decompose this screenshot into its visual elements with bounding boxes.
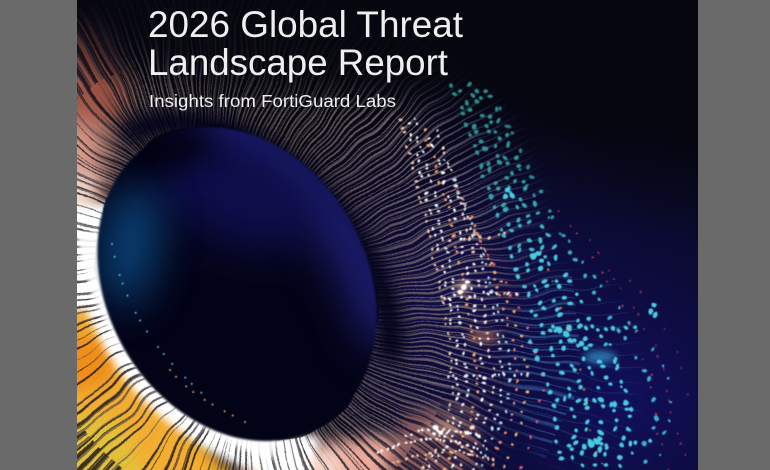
warm and white particles [378,120,542,470]
pupil [96,126,378,443]
particle field [378,85,690,470]
subtitle: Insights from FortiGuard Labs [149,91,396,111]
rim sparks along pupil edge [112,244,250,425]
bright coarse iris strands [77,11,486,470]
white rim of the pupil [88,232,275,450]
faint red particles [540,210,690,470]
teal particles [452,85,671,470]
title: 2026 Global Threat [148,4,464,45]
title: Landscape Report [148,42,449,83]
dark ring around pupil [125,122,391,360]
top darkening [77,0,490,115]
particle clusters [432,188,659,452]
title [148,4,464,83]
particle glows [422,281,616,438]
iris colour underglow [77,26,480,470]
